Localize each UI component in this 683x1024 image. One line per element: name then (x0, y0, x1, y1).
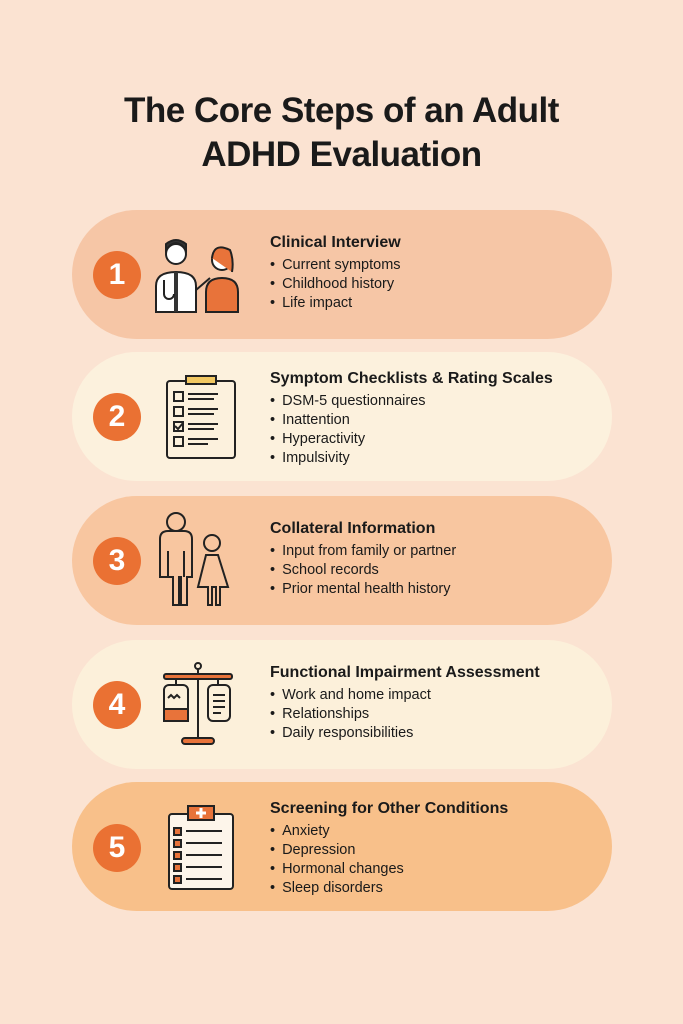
text: Anxiety (282, 823, 330, 839)
text: Sleep disorders (282, 880, 383, 896)
title: The Core Steps of an Adult (124, 91, 559, 130)
text: Work and home impact (282, 687, 431, 703)
panel: screening (72, 782, 612, 911)
text: Functional Impairment Assessment (270, 664, 540, 681)
text: Hyperactivity (282, 431, 365, 447)
number 4 (93, 681, 141, 729)
text (270, 520, 456, 597)
text (270, 370, 553, 466)
number 3: 3 (109, 544, 125, 577)
text: Inattention (282, 412, 350, 428)
icon: clipboard checklist (166, 375, 236, 459)
text: Impulsivity (282, 450, 350, 466)
text: Life impact (282, 295, 352, 311)
text: Relationships (282, 706, 369, 722)
number 4: 4 (109, 688, 125, 721)
text: Clinical Interview (270, 234, 401, 251)
text: Screening for Other Conditions (270, 800, 508, 817)
number 3 (93, 537, 141, 585)
number 5 (93, 824, 141, 872)
title (124, 91, 559, 174)
title: ADHD Evaluation (201, 135, 482, 174)
text (270, 234, 401, 311)
panel: collateral information (72, 496, 612, 625)
number 1 (93, 251, 141, 299)
text: Depression (282, 842, 355, 858)
text: DSM-5 questionnaires (282, 393, 426, 409)
icon: scale (163, 662, 233, 745)
text: Input from family or partner (282, 543, 456, 559)
icon: doctor and patient (155, 239, 239, 313)
text: Daily responsibilities (282, 725, 413, 741)
number 2: 2 (109, 400, 125, 433)
panel: functional impairment (72, 640, 612, 769)
panel: clinical interview (72, 210, 612, 339)
text: Hormonal changes (282, 861, 404, 877)
text: Collateral Information (270, 520, 435, 537)
text: Symptom Checklists & Rating Scales (270, 370, 553, 387)
text: Current symptoms (282, 257, 401, 273)
text (270, 800, 508, 896)
text: Prior mental health history (282, 581, 451, 597)
text: School records (282, 562, 379, 578)
text (270, 664, 540, 741)
panel: symptom checklists (72, 352, 612, 481)
number 5: 5 (109, 831, 125, 864)
icon: medical clipboard (168, 805, 234, 890)
number 1: 1 (109, 258, 125, 291)
icon: two people (159, 512, 230, 606)
text: Childhood history (282, 276, 394, 292)
number 2 (93, 393, 141, 441)
